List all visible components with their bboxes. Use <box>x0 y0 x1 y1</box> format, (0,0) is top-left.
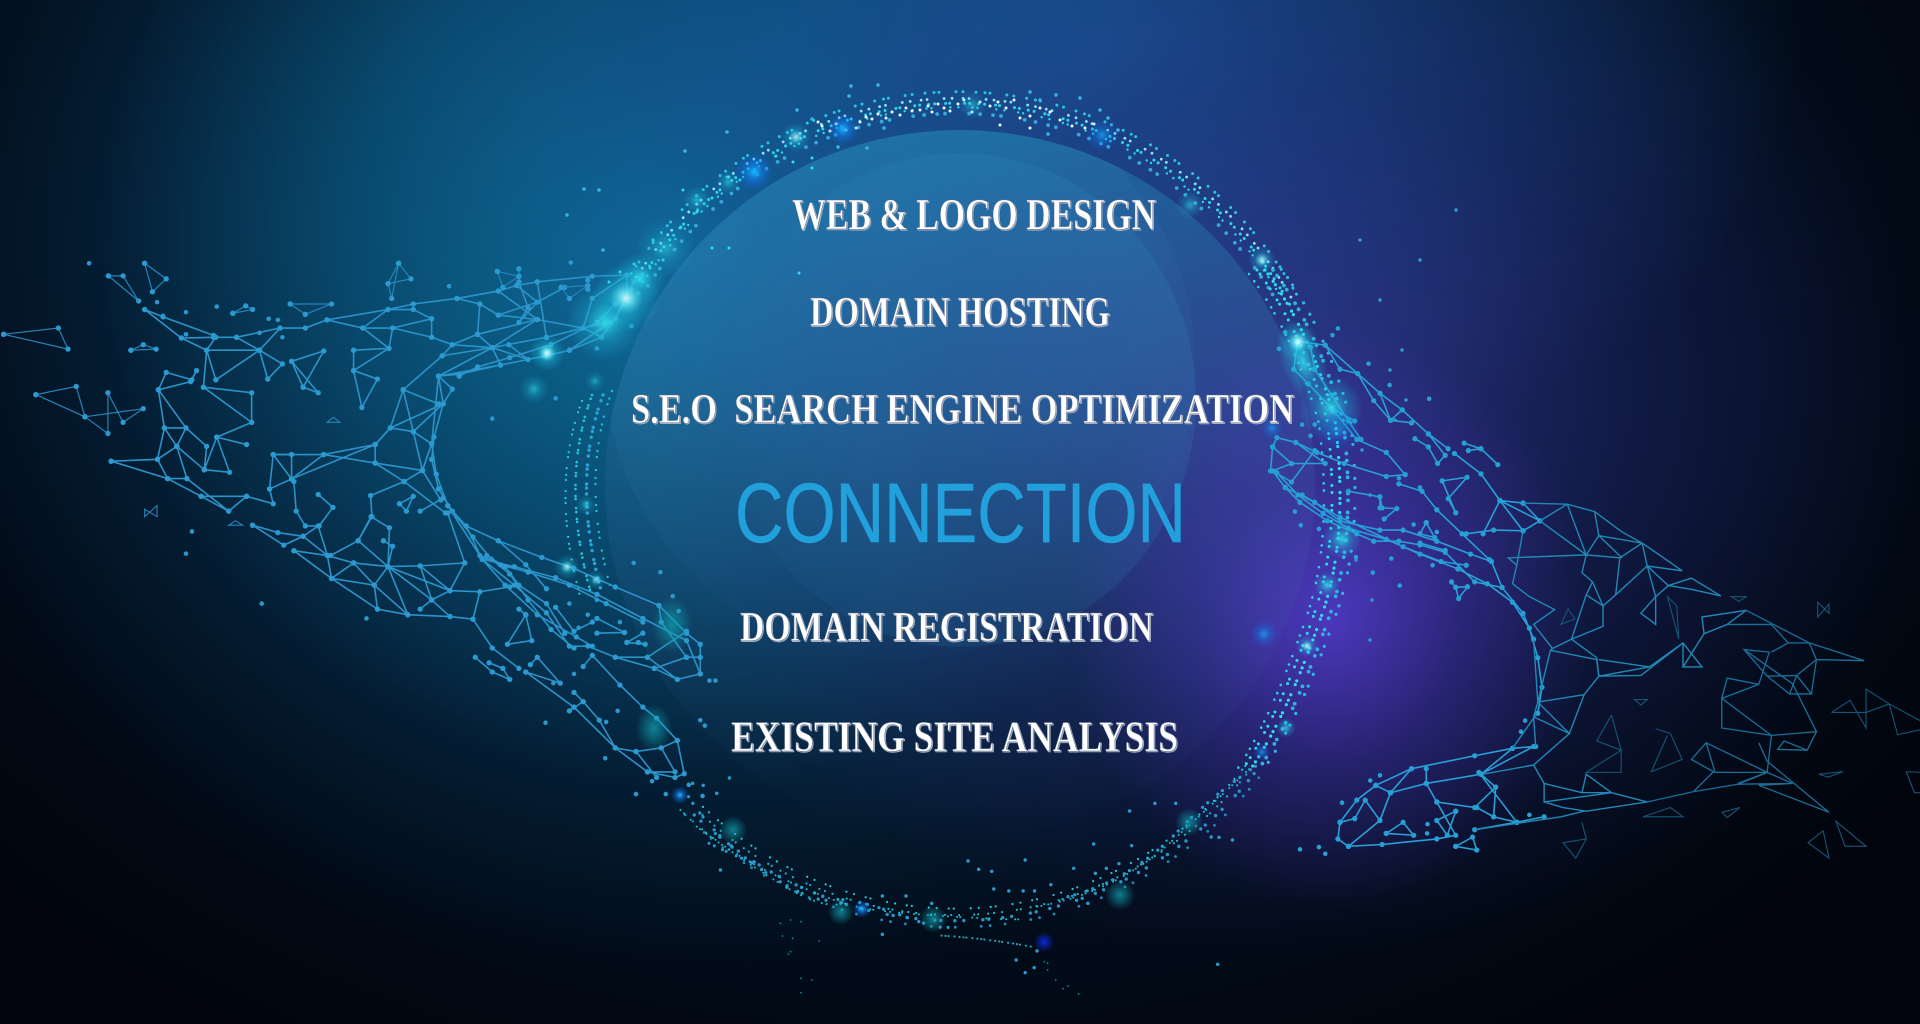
right hand: dotted mesh <box>1271 341 1544 850</box>
right hand wireframe <box>1271 328 1920 858</box>
main title: Connection: CONNECTION <box>735 466 1186 560</box>
right hand: free nodes <box>1279 328 1529 854</box>
scattered particles around the ring <box>567 85 1456 640</box>
heading: Existing Site Analysis: EXISTING SITE ANALYSIS <box>731 714 1178 761</box>
particle ring <box>565 92 1355 927</box>
heading: Domain Hosting: DOMAIN HOSTING <box>810 290 1110 336</box>
left hand: outlying fragments <box>4 263 588 433</box>
left hand wireframe <box>4 263 715 796</box>
right hand: wire forearm and palm <box>1475 503 1746 830</box>
heading: Web & Logo Design: WEB & LOGO DESIGN <box>792 190 1156 239</box>
left hand: dotted mesh <box>111 275 700 777</box>
right hand: outer palm lines <box>1647 610 1864 812</box>
heading: Domain Registration: DOMAIN REGISTRATION <box>740 605 1153 651</box>
right hand: floating triangle fragments <box>1561 597 1920 858</box>
left hand: free nodes <box>89 263 715 796</box>
heading: S.E.O Search Engine Optimization: S.E.O SEARCH ENGINE OPTIMIZATION <box>631 387 1294 433</box>
glow lights on ring and fingertips <box>519 91 1363 952</box>
central translucent disc <box>605 130 1315 660</box>
lower ring particles, traced from reference <box>680 763 1260 994</box>
